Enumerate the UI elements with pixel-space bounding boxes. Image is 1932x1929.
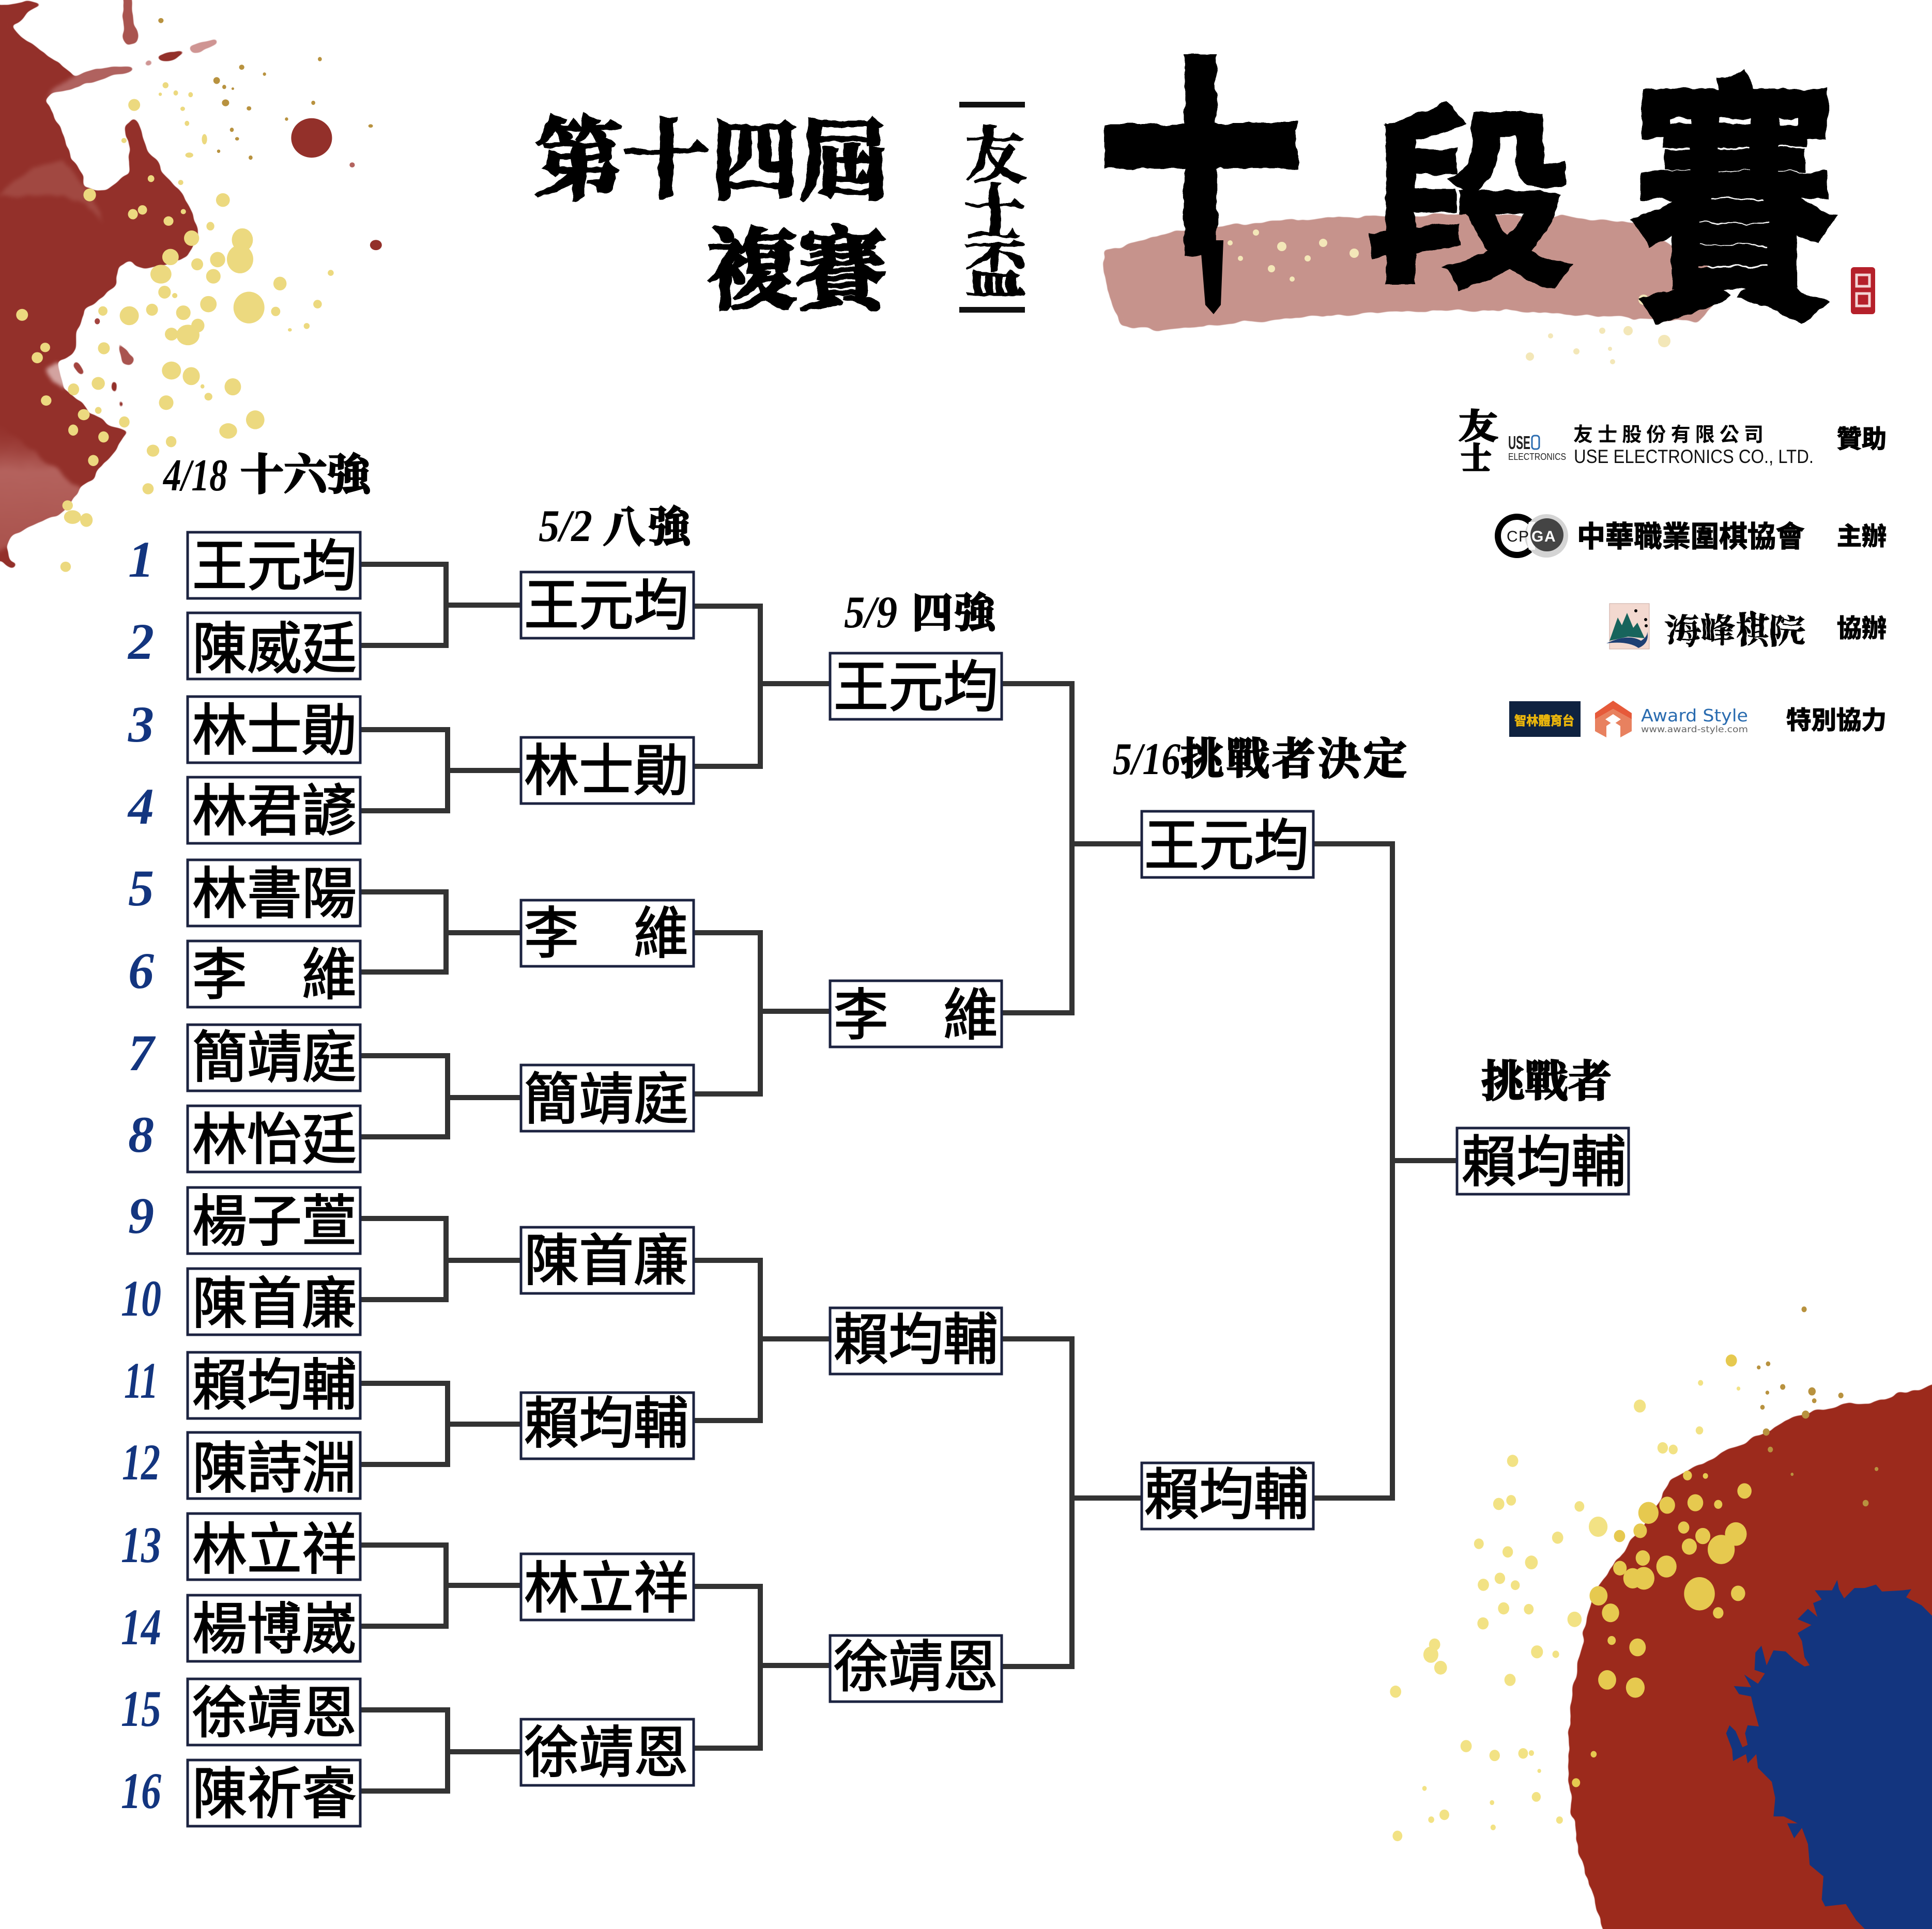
label: 贊助: 贊助: [1837, 426, 1887, 453]
seed numbers: 9: [128, 1187, 154, 1244]
sponsor: company name: [1573, 424, 1814, 467]
title: 友士盃 with rules: 士: [964, 179, 1025, 247]
round heading: 4/18 十六強: 4/18: [162, 451, 227, 501]
round heading: 挑戰者: 挑戰者: [1481, 1058, 1612, 1106]
organiser: CPGA logo: [1498, 514, 1568, 558]
quarterfinal: 王元均: 王元均: [524, 574, 688, 637]
round heading: 5/2 八強: 八強: [603, 504, 694, 551]
seed numbers: 4: [127, 778, 154, 835]
seed numbers: 14: [121, 1598, 161, 1656]
label: 特別協力: 特別協力: [1786, 707, 1887, 734]
organiser: CPGA logo: GA: [1531, 528, 1556, 545]
label: 主辦: 主辦: [1837, 523, 1887, 550]
seed numbers: 2: [127, 613, 154, 670]
round of 16: player 11: 賴均輔: [192, 1354, 357, 1416]
round heading: 5/16 挑戰者決定: 5/16: [1113, 734, 1180, 784]
seed numbers: 16: [121, 1762, 161, 1819]
sponsor: USE Electronics logo: [1459, 408, 1566, 476]
title: 第十四屆: 第十四屆: [535, 113, 887, 210]
seed numbers: 5: [128, 859, 154, 917]
sponsor: company name: USE ELECTRONICS CO., LTD.: [1574, 446, 1814, 467]
seed numbers: 13: [121, 1516, 161, 1573]
round heading: 5/16 挑戰者決定: 挑戰者決定: [1180, 736, 1407, 784]
co-organiser: Haifeng logo: [1606, 604, 1649, 649]
title: 十段賽: 賽: [1631, 63, 1837, 352]
round of 16: player 14: 楊博崴: [192, 1598, 357, 1660]
quarterfinal: 陳首廉: 陳首廉: [524, 1229, 688, 1292]
challenger decider: 賴均輔: 賴均輔: [1144, 1463, 1309, 1526]
sponsor: USE Electronics logo: 友: [1459, 408, 1498, 446]
title: 友士盃 with rules: 友: [964, 123, 1025, 191]
seed numbers: 8: [128, 1106, 154, 1163]
quarterfinal: 林立祥: 林立祥: [524, 1557, 688, 1619]
quarterfinal: 簡靖庭: 簡靖庭: [524, 1068, 688, 1131]
round heading: 4/18 十六強: 十六強: [240, 452, 374, 500]
semifinal: 李維: 李 維: [834, 984, 998, 1046]
ink splash: bottom right: [1390, 1306, 1932, 1929]
quarterfinal: 李維: 李 維: [524, 902, 688, 965]
seed numbers: 15: [121, 1680, 161, 1737]
title: 複賽: 複賽: [707, 223, 892, 321]
round of 16: player 6: 李 維: [192, 944, 357, 1006]
round of 16: player 9: 楊子萱: [192, 1190, 357, 1253]
seed numbers: 6: [128, 942, 154, 999]
round of 16: player 5: 林書陽: [192, 862, 357, 925]
seed numbers: 11: [124, 1352, 158, 1409]
round heading: 5/9 四強: 四強: [912, 591, 999, 637]
special thanks: Award Style icon: [1595, 701, 1632, 737]
seed numbers: 1: [128, 531, 154, 588]
quarterfinal: 徐靖恩: 徐靖恩: [524, 1721, 688, 1784]
label: 協辦: 協辦: [1837, 615, 1887, 642]
title: 十段賽: [1097, 55, 1837, 352]
seed numbers: 7: [128, 1024, 156, 1082]
title brush stroke: [1103, 214, 1730, 364]
organiser name: 中華職業圍棋協會: [1577, 520, 1804, 553]
round of 16: player 13: 林立祥: [192, 1518, 357, 1581]
round of 16: player 15: 徐靖恩: [192, 1681, 357, 1744]
special thanks: 智林體育台: 智林體育台: [1514, 714, 1574, 728]
round heading: 5/9 四強: 5/9: [844, 588, 897, 638]
special thanks: Award Style wordmark: www.award-style.com: [1641, 724, 1748, 735]
sponsor: company name: 友士股份有限公司: [1573, 424, 1764, 446]
round heading: 5/2 八強: 5/2: [539, 501, 592, 551]
round heading: 4/18 十六強: [162, 451, 374, 501]
seed numbers: [121, 531, 161, 1819]
organiser: CPGA logo: CP: [1507, 528, 1529, 545]
round heading: 5/9 四強: [844, 588, 999, 638]
special thanks: Award Style wordmark: Award Style: [1641, 705, 1748, 726]
quarterfinal: 林士勛: 林士勛: [524, 739, 688, 802]
seed numbers: 10: [121, 1270, 161, 1327]
round of 16: player 12: 陳詩淵: [192, 1437, 357, 1500]
ink splash: top left: [0, 0, 382, 572]
round of 16: player 4: 林君諺: [192, 780, 357, 842]
round of 16: player 2: 陳威廷: [192, 618, 357, 680]
special thanks: 智林體育台: [1509, 701, 1581, 737]
special thanks: Award Style wordmark: [1641, 705, 1748, 735]
semifinal: 王元均: 王元均: [834, 656, 998, 718]
bracket connector lines: [361, 564, 1456, 1791]
seal stamp: [1851, 267, 1875, 314]
seed numbers: 12: [122, 1433, 160, 1491]
sponsor: USE Electronics logo: 士: [1461, 442, 1492, 476]
co-organiser name: 海峰棋院: [1666, 612, 1804, 650]
round of 16: player 16: 陳祈睿: [192, 1763, 357, 1825]
round of 16: player 7: 簡靖庭: [192, 1026, 357, 1089]
sponsor: USE Electronics logo: USE: [1508, 432, 1530, 453]
round of 16: player 10: 陳首廉: [192, 1272, 357, 1335]
title: 友士盃 with rules: [959, 102, 1029, 313]
seed numbers: 3: [128, 696, 154, 753]
title: 十段賽: 十: [1097, 55, 1304, 268]
round heading: 5/2 八強: [539, 501, 694, 551]
round of 16: player 8: 林怡廷: [192, 1108, 357, 1171]
quarterfinal: 賴均輔: 賴均輔: [524, 1392, 688, 1455]
round of 16: player 3: 林士勛: [192, 699, 357, 762]
challenger: 賴均輔: 賴均輔: [1462, 1131, 1626, 1193]
round of 16: player 1: 王元均: [192, 535, 357, 597]
title: 友士盃 with rules: 盃: [964, 237, 1029, 304]
semifinal: 賴均輔: 賴均輔: [834, 1308, 998, 1371]
challenger decider: 王元均: 王元均: [1144, 814, 1309, 877]
title: 十段賽: 段: [1367, 97, 1574, 310]
semifinal: 徐靖恩: 徐靖恩: [834, 1635, 998, 1698]
sponsor: USE Electronics logo: ELECTRONICS: [1508, 452, 1566, 462]
